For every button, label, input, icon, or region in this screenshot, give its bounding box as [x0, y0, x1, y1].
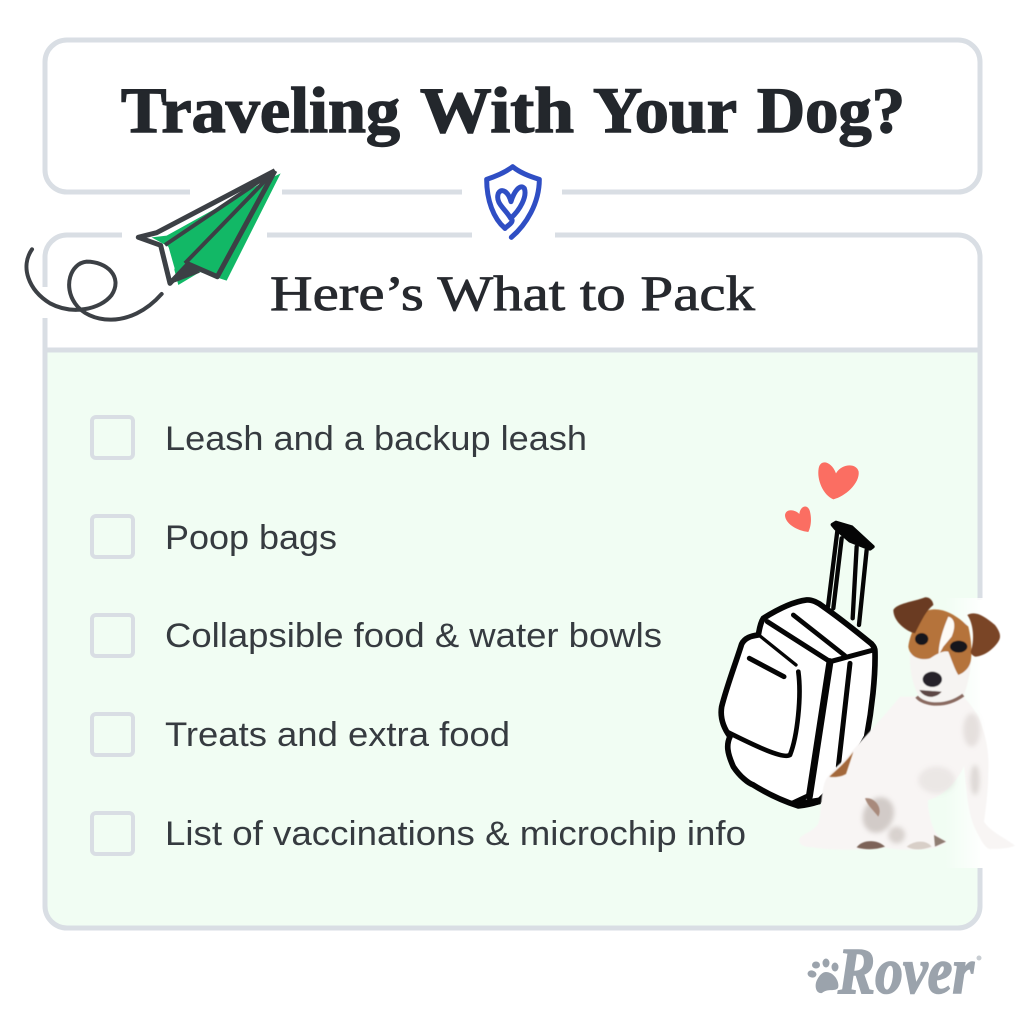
- panel background: [45, 351, 980, 928]
- registered mark: [976, 956, 982, 960]
- icon: hearts: [785, 462, 859, 532]
- icon: paper plane with trail: [26, 171, 281, 320]
- fur shading: [857, 713, 980, 843]
- item: vaccinations: List of vaccinations & microchip info: [165, 815, 746, 853]
- plane fill: [152, 173, 281, 285]
- title: Traveling: [121, 75, 400, 147]
- eyes: [915, 633, 928, 645]
- body: [799, 697, 1015, 850]
- blaze: [939, 617, 954, 655]
- item: leash: Leash and a backup leash: [165, 420, 587, 458]
- logo: Rover: [807, 935, 982, 1008]
- icon: shield with heart: [487, 167, 539, 237]
- subheading: Here’s What to Pack: [270, 265, 755, 321]
- handle: [828, 528, 867, 625]
- item: bowls: Collapsible food & water bowls: [165, 617, 662, 655]
- paw: [807, 958, 838, 993]
- item: poop bags: [92, 516, 337, 557]
- collar: [917, 695, 963, 704]
- nose: [923, 672, 942, 687]
- title: With: [420, 75, 574, 147]
- mouth: [919, 690, 942, 697]
- wordmark: Rover: [837, 935, 975, 1008]
- panel: title box: [45, 40, 980, 192]
- case body: [721, 600, 875, 806]
- pocket: [727, 672, 799, 756]
- title: [121, 75, 905, 147]
- tan markings: [908, 609, 971, 675]
- title: Your: [593, 75, 737, 147]
- item: treats: Treats and extra food: [165, 716, 510, 754]
- ears: [893, 597, 933, 633]
- head: [893, 597, 1000, 704]
- checklist: [92, 417, 746, 854]
- markings: [829, 752, 853, 777]
- halo: [945, 598, 985, 868]
- trail: [26, 249, 162, 320]
- title: Dog?: [757, 75, 905, 147]
- photo: terrier dog: [799, 597, 1015, 868]
- icon: suitcase: [721, 523, 875, 807]
- lid: [767, 622, 873, 662]
- item: poop bags: Poop bags: [165, 519, 337, 557]
